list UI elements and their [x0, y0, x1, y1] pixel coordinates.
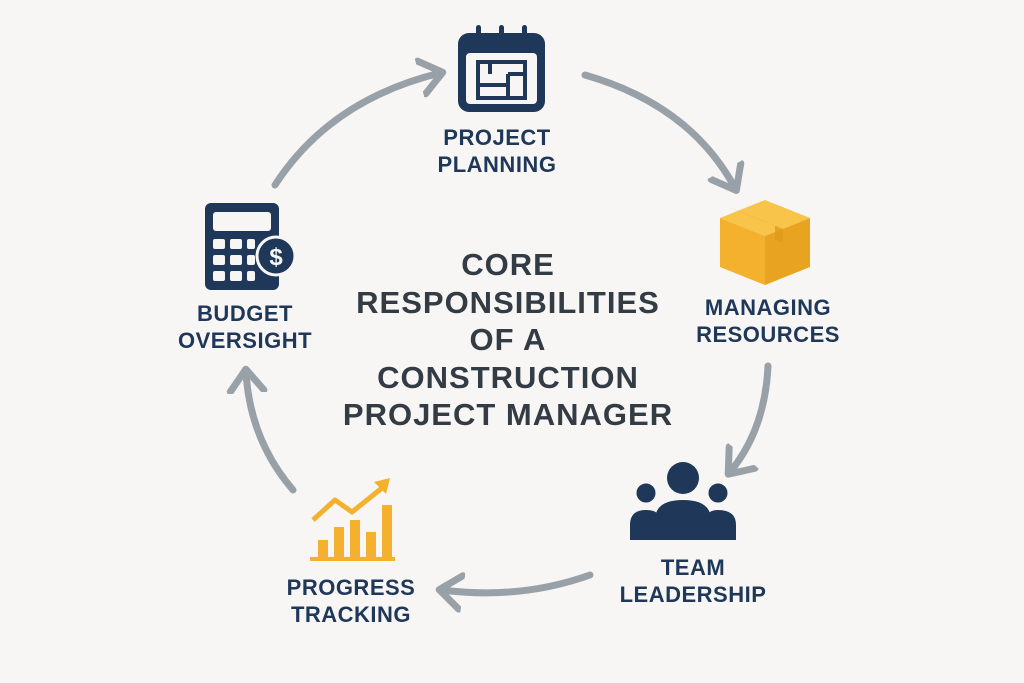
icon: calendar blueprint	[458, 25, 545, 112]
label: progress tracking: PROGRESS	[287, 575, 415, 600]
icon: calculator: $	[269, 244, 283, 271]
label: managing resources: RESOURCES	[696, 322, 840, 347]
title: OF A	[470, 322, 546, 357]
label: managing resources	[696, 295, 840, 347]
label: team leadership	[620, 555, 766, 607]
label: project planning: PROJECT	[443, 125, 551, 150]
arrow: progress to budget	[246, 372, 293, 490]
icon: box	[720, 200, 810, 285]
arrow: resources to team	[730, 366, 768, 472]
label: team leadership: LEADERSHIP	[620, 582, 766, 607]
title	[343, 247, 673, 432]
title: RESPONSIBILITIES	[356, 284, 660, 320]
icon: calculator	[205, 203, 295, 290]
label: progress tracking	[287, 575, 415, 627]
label: team leadership: TEAM	[661, 555, 725, 580]
label: project planning	[438, 125, 556, 177]
icon: team	[630, 462, 736, 540]
title: CORE	[461, 247, 555, 282]
label: budget oversight: BUDGET	[197, 301, 293, 326]
label: budget oversight: OVERSIGHT	[178, 328, 312, 353]
label: managing resources: MANAGING	[705, 295, 831, 320]
arrow: team to progress	[442, 575, 590, 593]
label: progress tracking: TRACKING	[291, 602, 411, 627]
title: CONSTRUCTION	[377, 360, 639, 394]
label: project planning: PLANNING	[438, 152, 556, 177]
icon: progress chart	[310, 478, 395, 561]
arrow: planning to resources	[585, 75, 735, 188]
label: budget oversight	[178, 301, 312, 353]
title: PROJECT MANAGER	[343, 397, 673, 432]
arrow: budget to planning	[275, 73, 440, 185]
